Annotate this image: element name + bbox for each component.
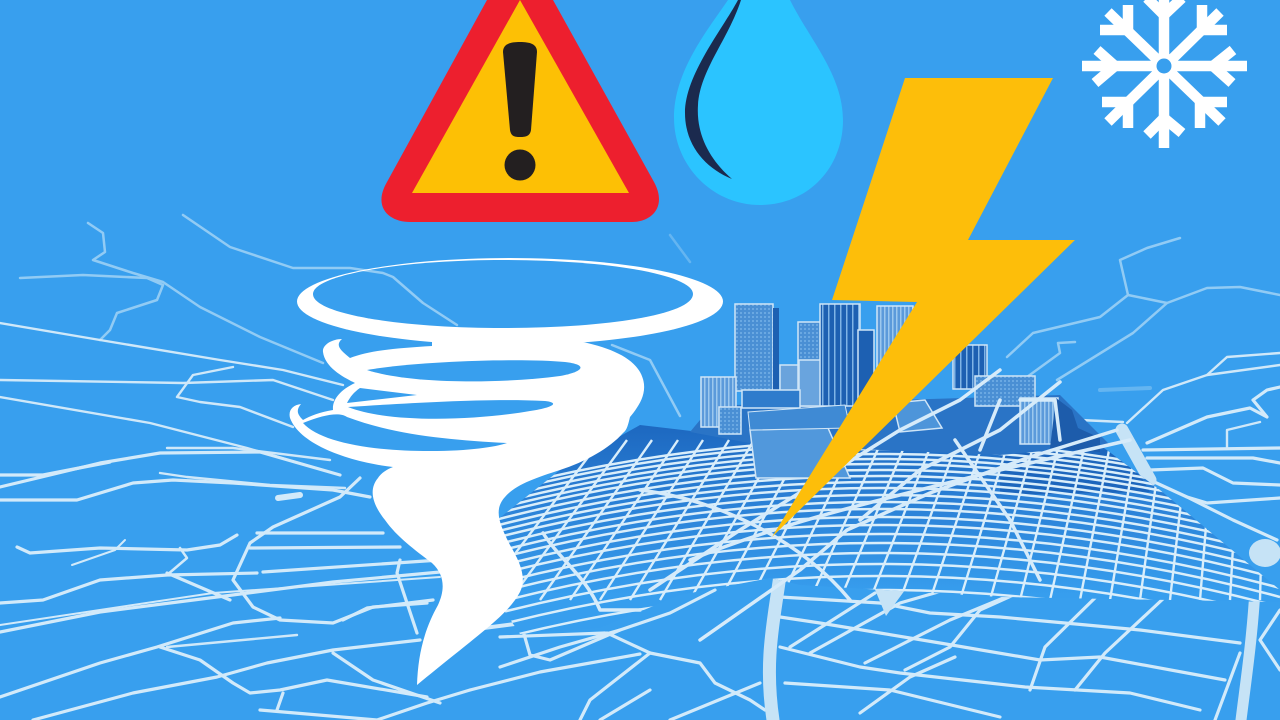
left blocks (701, 377, 800, 434)
road junction blobs (866, 539, 1280, 616)
tower A (735, 304, 779, 391)
plaza (750, 428, 850, 478)
city grid: dense streets (499, 425, 1280, 634)
icon: tornado (280, 250, 730, 690)
icon: water drop (674, 0, 843, 205)
road network: outskirts (0, 215, 1280, 720)
icon: warning triangle (381, 0, 659, 222)
city skyline (690, 304, 1110, 478)
city base (690, 395, 1110, 455)
road network: arterials over the city (543, 370, 1130, 640)
mid block (893, 400, 942, 432)
right block (975, 376, 1100, 452)
icon: lightning bolt (772, 78, 1075, 537)
icon: snowflake (1082, 0, 1247, 148)
tower cluster (780, 304, 913, 406)
right towers (953, 345, 987, 389)
